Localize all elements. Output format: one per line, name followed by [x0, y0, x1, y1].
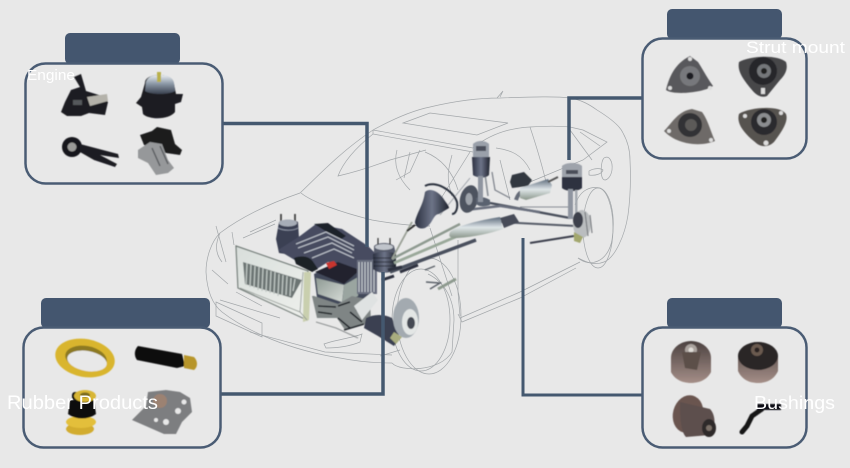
- panel: engine mounts: [26, 33, 222, 184]
- front brake disc: [364, 298, 419, 346]
- car body outline: [206, 91, 630, 374]
- label: Strut mount: [746, 39, 845, 57]
- panel: bushings: [642, 298, 835, 448]
- icon: metal bracket plate: [132, 390, 192, 434]
- connector: bushings panel to underbody: [523, 238, 642, 395]
- header tab: [65, 33, 180, 64]
- engine assembly: [236, 141, 592, 346]
- icon: bushing 3: [669, 392, 716, 437]
- panel: rubber products: [7, 298, 220, 448]
- label: Engine: [27, 68, 75, 84]
- label: Rubber Products: [7, 393, 158, 414]
- panel frame: [24, 328, 220, 448]
- radiator: [236, 246, 311, 322]
- icon: strut mount 1: [666, 56, 713, 93]
- panel frame: [642, 38, 806, 158]
- fuel tank parts: [510, 172, 558, 200]
- icon: bushing link arm: [742, 404, 781, 432]
- icon: strut mount 3: [664, 109, 715, 144]
- label: Bushings: [754, 392, 835, 413]
- panel frame: [642, 328, 806, 448]
- icon: black dust boot: [135, 346, 197, 370]
- connector: rubber products panel to front strut: [221, 272, 383, 394]
- icon: torque rod mount: [62, 137, 119, 167]
- connector: strut mount panel to rear strut: [569, 98, 642, 160]
- icon: cylindrical hydro mount: [136, 72, 183, 118]
- icon: bushing 2: [738, 342, 778, 383]
- drive shafts: [382, 172, 576, 289]
- exhaust muffler: [449, 214, 519, 238]
- icon: engine mount with arm: [61, 74, 108, 116]
- connector: engine panel to engine: [223, 124, 367, 247]
- icon: strut mount 4: [738, 108, 787, 146]
- icon: bracket mount: [138, 127, 182, 175]
- rear brake disc: [573, 210, 592, 243]
- icon: bushing 1: [671, 341, 711, 383]
- header tab: [667, 298, 782, 328]
- front suspension strut: [373, 238, 396, 273]
- panel frame: [26, 64, 222, 184]
- rear-left suspension strut: [472, 141, 490, 202]
- icon: strut mount 2: [739, 57, 787, 97]
- icon: yellow bump stop: [66, 390, 96, 435]
- header tab: [667, 9, 782, 39]
- header tab: [41, 298, 210, 328]
- icon: yellow spring seat: [52, 334, 118, 382]
- gearbox and steering: [407, 184, 457, 231]
- rear-right suspension strut: [562, 163, 582, 219]
- left brake disc: [457, 183, 490, 215]
- panel: strut mount: [642, 9, 845, 158]
- engine block: [276, 214, 378, 338]
